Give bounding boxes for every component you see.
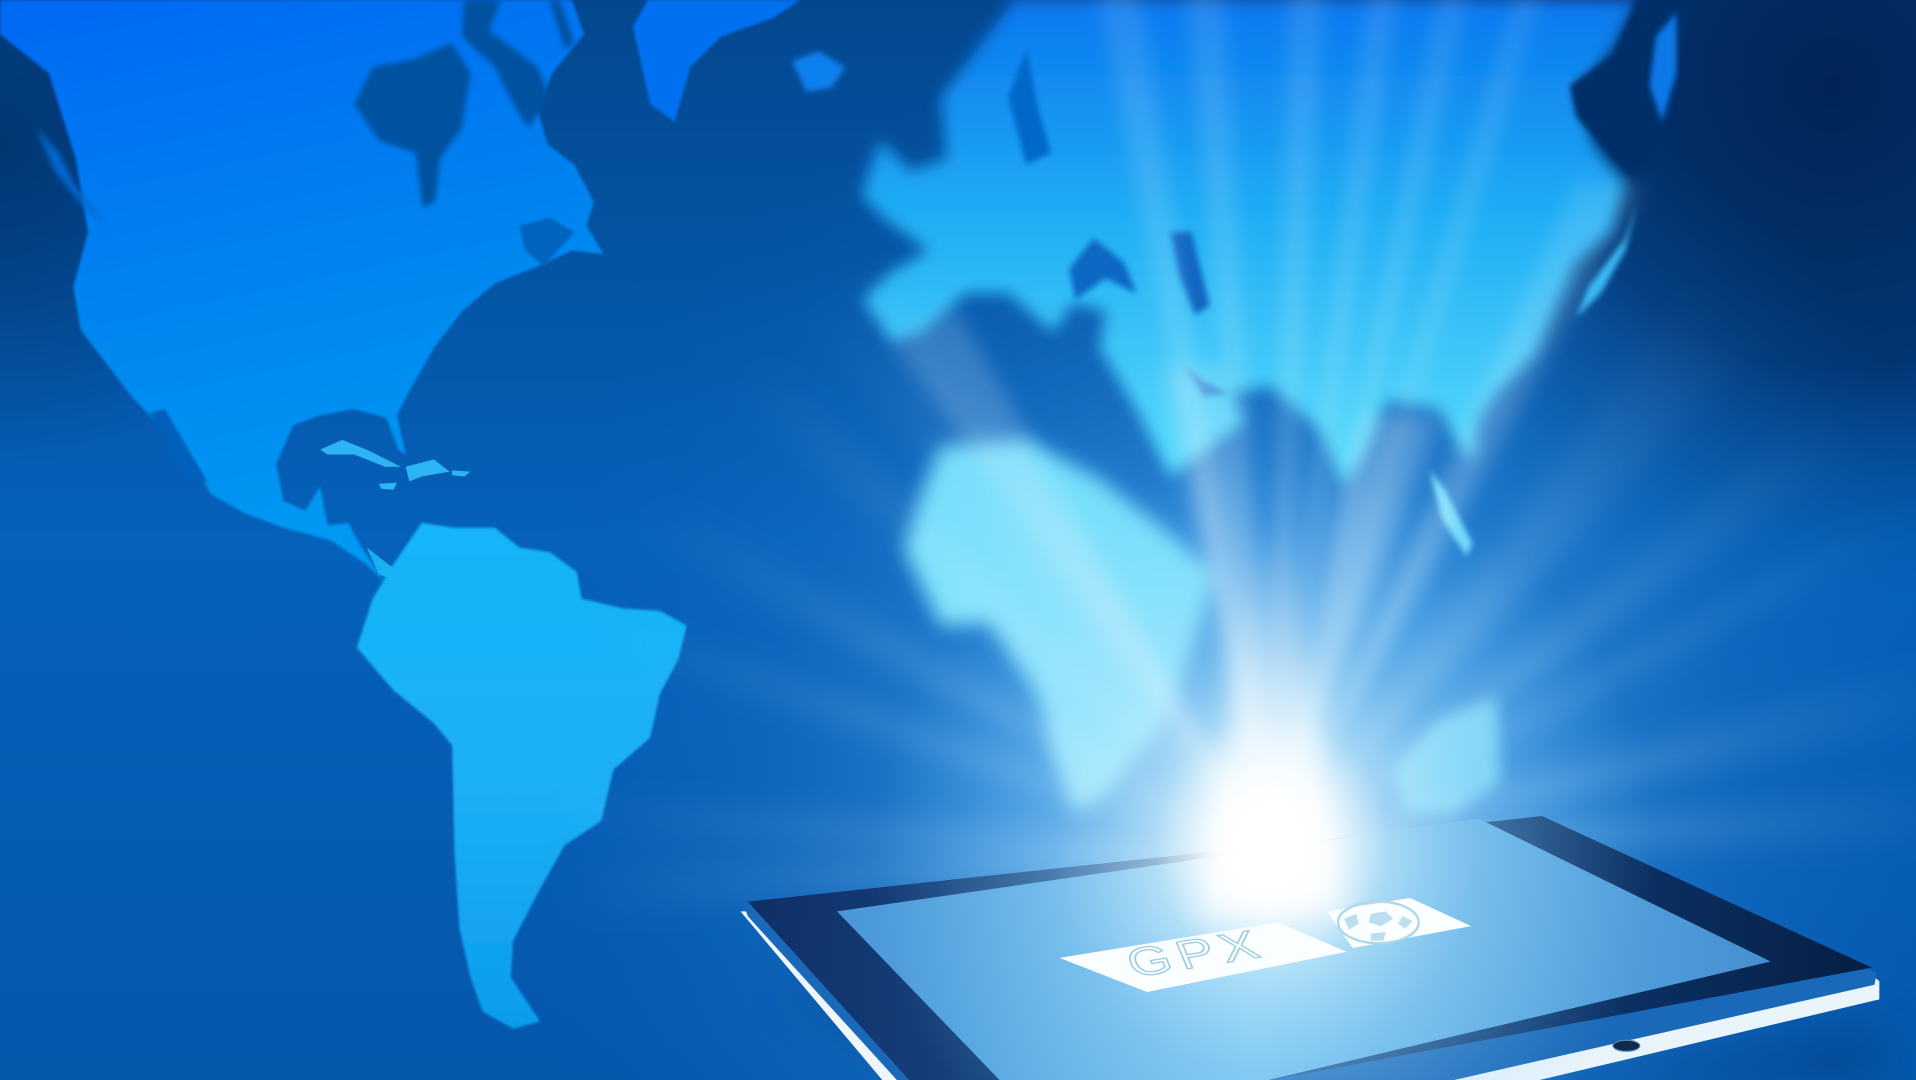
Japan [1576, 202, 1637, 318]
tablet screen [837, 819, 1771, 1080]
tablet blue side band [744, 816, 1877, 1080]
map: Alaska peninsula fragments [37, 128, 108, 226]
Gulf of St Lawrence [519, 217, 574, 266]
map: Iceland [792, 51, 846, 92]
sideways light rays [489, 183, 1916, 929]
Baja California [149, 409, 208, 483]
map: Africa [904, 440, 1216, 812]
map: South America [357, 523, 687, 1029]
charging port [1613, 1040, 1640, 1051]
upward light rays [892, 0, 1644, 855]
soccer ball label [1327, 898, 1471, 948]
tablet bottom white edge [1442, 974, 1879, 1080]
map: Eurasia [861, 0, 1692, 556]
Black Sea [1069, 238, 1136, 299]
Red Sea and Persian Gulf [1185, 367, 1228, 397]
map: Australia [1393, 696, 1501, 812]
Canadian Arctic channels [462, 0, 574, 128]
tablet bezel [748, 816, 1872, 1080]
tablet white edge [740, 911, 907, 1080]
map: Caribbean islands [320, 440, 470, 584]
Hudson Bay [354, 43, 470, 208]
Baltic [1008, 49, 1051, 165]
Caspian Sea [1171, 232, 1210, 315]
central light glow [855, 452, 1674, 1080]
GPX label [1059, 921, 1347, 992]
GPX label: GPX [1120, 921, 1273, 986]
tablet shadow [782, 977, 1882, 1080]
Siberian notch [1570, 0, 1692, 183]
SE Asian islands [1430, 470, 1472, 556]
map: Greenland [633, 0, 800, 122]
tablet [740, 816, 1882, 1080]
Kamchatka [1650, 12, 1676, 122]
map: North America [0, 0, 604, 584]
